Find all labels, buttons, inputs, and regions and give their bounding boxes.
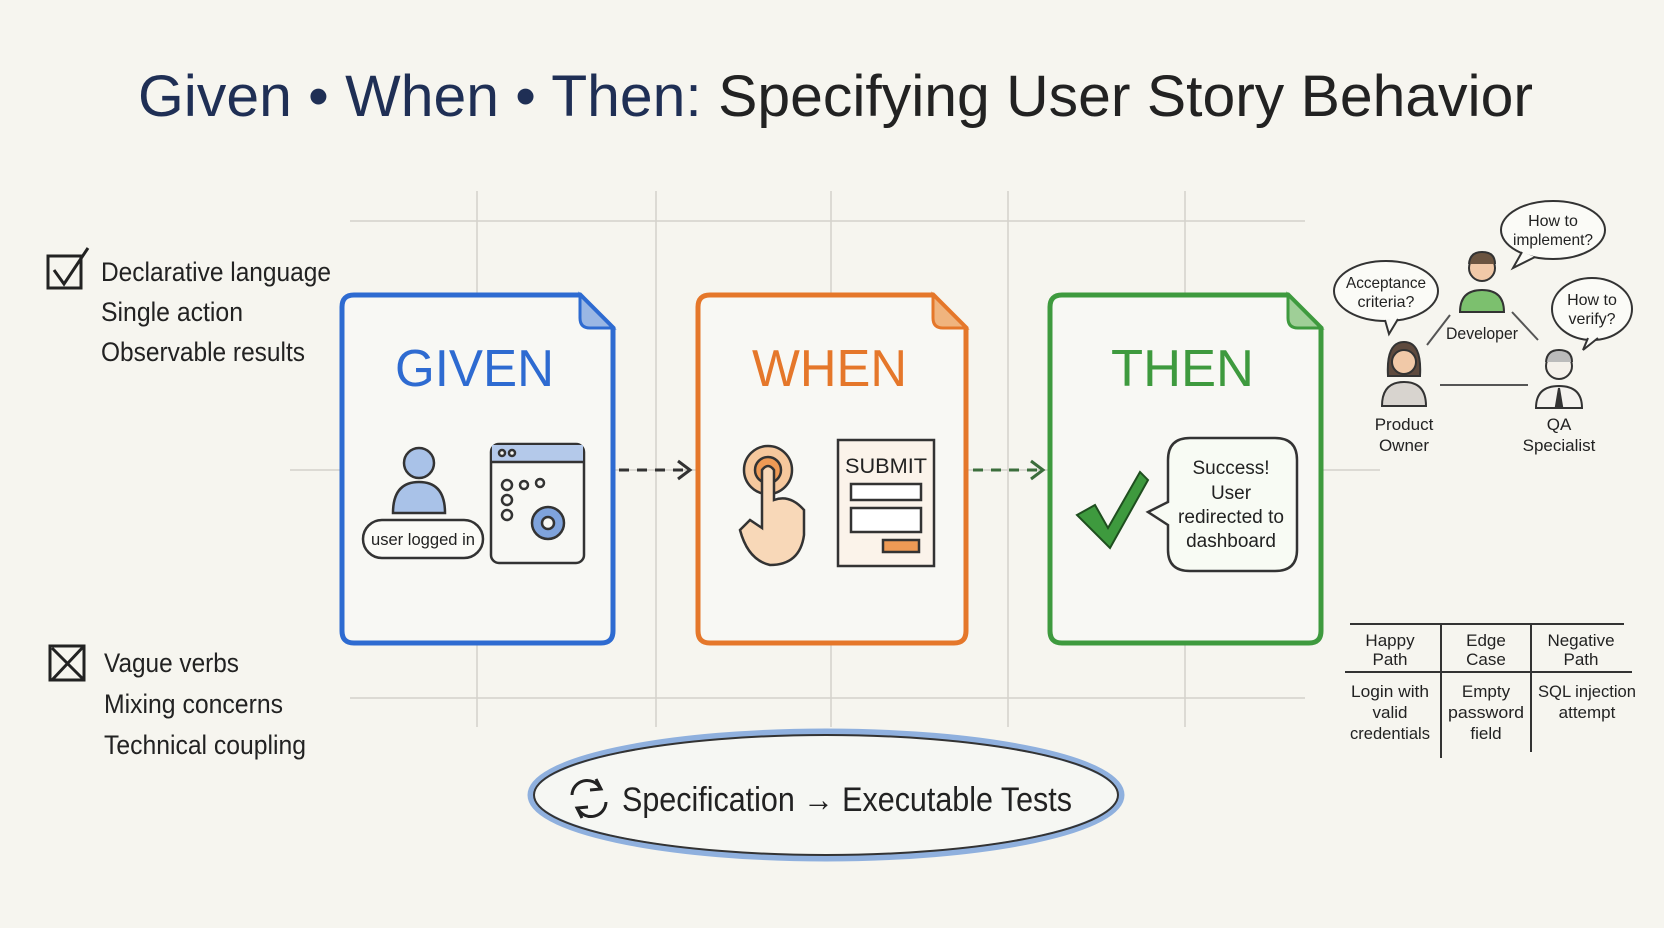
table: test scenarios: SQL injection [1538, 682, 1636, 701]
callout: acceptance criteria: criteria? [1358, 294, 1415, 311]
callout: how to verify [1552, 278, 1632, 350]
panel: don't list [50, 646, 306, 760]
heading: WHEN: WHEN [752, 340, 907, 398]
icon: product owner [1382, 342, 1426, 406]
label: user logged in: user logged in [371, 530, 475, 549]
arrow: given to when [619, 461, 690, 479]
panel: don't list: Technical coupling [104, 730, 306, 760]
callout: specification to executable tests [531, 732, 1121, 858]
table: test scenarios: valid [1373, 703, 1407, 722]
callout: acceptance criteria: Acceptance [1346, 275, 1426, 292]
panel: do list: Declarative language [101, 257, 331, 287]
panel: do list: Single action [101, 297, 243, 327]
table: test scenarios: credentials [1350, 724, 1430, 743]
callout: how to implement: How to [1528, 213, 1578, 230]
icon: x box [50, 646, 84, 680]
table: test scenarios: Negative [1547, 631, 1615, 650]
panel: team collaboration: Owner [1379, 436, 1429, 455]
panel: don't list: Mixing concerns [104, 689, 283, 719]
panel: team collaboration: Specialist [1523, 436, 1596, 455]
table: test scenarios: Login with [1351, 682, 1429, 701]
panel: don't list: Vague verbs [104, 648, 239, 678]
table: test scenarios: Happy [1365, 631, 1415, 650]
table: test scenarios: Path [1373, 650, 1407, 669]
callout: how to implement [1501, 201, 1605, 268]
callout: success: User [1211, 483, 1252, 504]
panel: then [1050, 295, 1321, 643]
table: test scenarios: Case [1466, 650, 1506, 669]
title: Given • When • Then: Specifying User Story Behavior [138, 64, 1533, 129]
panel: team collaboration: Developer [1446, 324, 1518, 343]
icon: refresh [572, 779, 606, 818]
panel: do list: Observable results [101, 337, 305, 367]
callout: success: redirected to [1178, 507, 1284, 528]
callout: specification to executable tests: Specification → Executable Tests [622, 781, 1072, 819]
callout: how to implement: implement? [1513, 232, 1593, 249]
table: test scenarios: field [1470, 724, 1502, 743]
arrow: when to then [973, 461, 1043, 479]
table: test scenarios: password [1448, 703, 1524, 722]
panel: do list [48, 248, 331, 367]
panel: team collaboration: QA [1547, 415, 1572, 434]
icon: developer [1460, 252, 1504, 312]
callout: how to verify: How to [1567, 292, 1617, 309]
icon: submit form: SUBMIT [845, 455, 927, 478]
callout: acceptance criteria [1334, 261, 1438, 334]
table: test scenarios [1345, 624, 1636, 758]
callout: success: Success! [1192, 458, 1270, 479]
icon: qa specialist [1536, 350, 1582, 408]
icon: checkmark [1077, 472, 1148, 548]
table: test scenarios: Empty [1462, 682, 1511, 701]
panel: team collaboration [1334, 201, 1632, 455]
icon: settings window [491, 444, 584, 563]
callout: success [1148, 438, 1297, 571]
heading: GIVEN: GIVEN [395, 340, 554, 398]
panel: team collaboration: Product [1375, 415, 1434, 434]
icon: tapping hand [740, 446, 804, 565]
icon: user [393, 448, 445, 513]
table: test scenarios: Path [1564, 650, 1598, 669]
table: test scenarios: Edge [1466, 631, 1506, 650]
icon: checkbox [48, 248, 88, 288]
heading: THEN: THEN [1111, 340, 1254, 398]
panel: when [698, 295, 966, 643]
callout: how to verify: verify? [1568, 311, 1616, 328]
table: test scenarios: attempt [1559, 703, 1616, 722]
label: user logged in [363, 520, 483, 558]
icon: submit form [838, 440, 934, 566]
panel: given [342, 295, 613, 643]
callout: success: dashboard [1186, 531, 1276, 552]
